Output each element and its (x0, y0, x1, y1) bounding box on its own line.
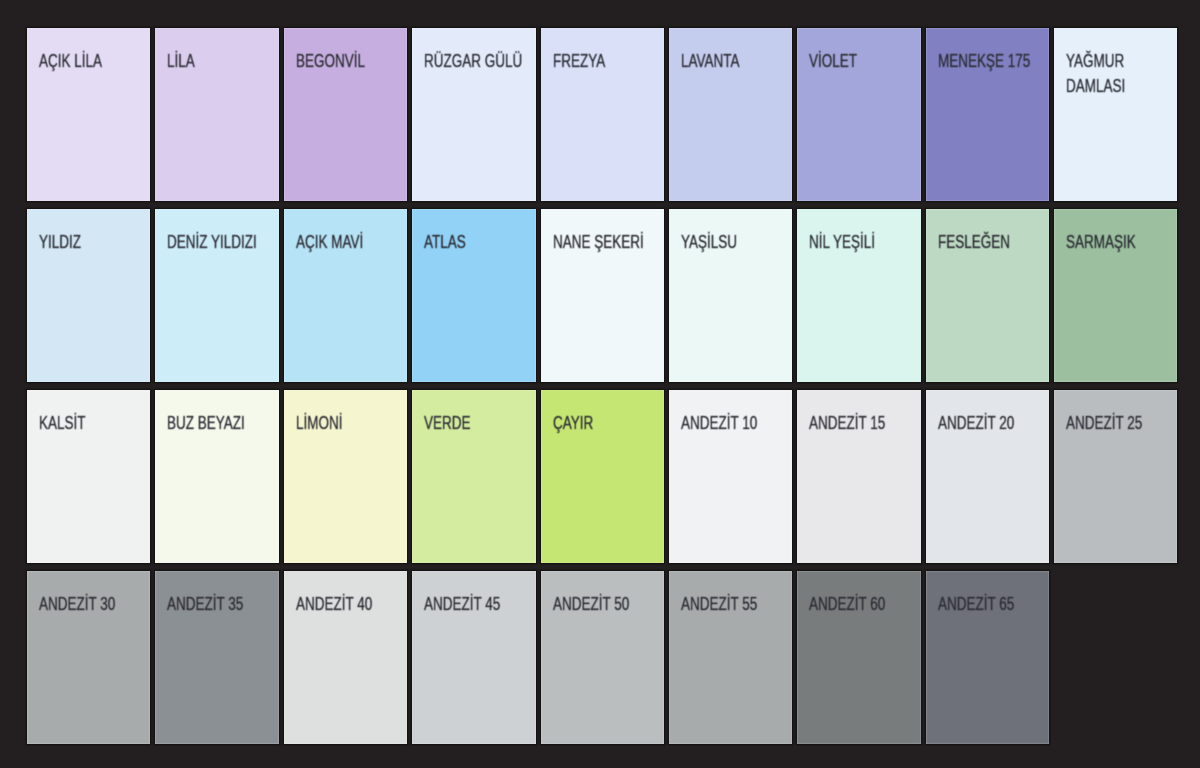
swatch: ANDEZİT 60: ANDEZİT 60 (809, 594, 885, 614)
swatch: LİMONİ (284, 390, 407, 563)
swatch: KALSİT (27, 390, 150, 563)
swatch: FREZYA (541, 28, 664, 201)
swatch: RÜZGAR GÜLÜ: RÜZGAR GÜLÜ (424, 51, 522, 71)
swatch: KALSİT: KALSİT (39, 413, 86, 433)
swatch: ANDEZİT 65 (926, 571, 1049, 744)
swatch: FESLEĞEN: FESLEĞEN (938, 232, 1010, 252)
swatch: ANDEZİT 30: ANDEZİT 30 (39, 594, 115, 614)
swatch: ANDEZİT 40: ANDEZİT 40 (296, 594, 372, 614)
swatch: VERDE: VERDE (424, 413, 471, 433)
swatch: ANDEZİT 60 (797, 571, 921, 744)
swatch: ANDEZİT 10 (669, 390, 792, 563)
swatch: MENEKŞE 175: MENEKŞE 175 (938, 51, 1030, 71)
swatch: ANDEZİT 35 (155, 571, 279, 744)
swatch: YAĞMUR DAMLASI: DAMLASI (1066, 76, 1125, 96)
swatch: YILDIZ (27, 209, 150, 382)
swatch: YAŞİLSU: YAŞİLSU (681, 232, 737, 252)
swatch: ANDEZİT 15 (797, 390, 921, 563)
swatch: ANDEZİT 25 (1054, 390, 1177, 563)
swatch: LAVANTA: LAVANTA (681, 51, 740, 71)
swatch: ANDEZİT 55 (669, 571, 792, 744)
swatch: ATLAS: ATLAS (424, 232, 466, 252)
swatch: ÇAYIR (541, 390, 664, 563)
swatch: DENİZ YILDIZI: DENİZ YILDIZI (167, 232, 257, 252)
swatch: ANDEZİT 50 (541, 571, 664, 744)
swatch: YAŞİLSU (669, 209, 792, 382)
swatch: YAĞMUR DAMLASI (1054, 28, 1177, 201)
swatch: NANE ŞEKERİ: NANE ŞEKERİ (553, 232, 644, 252)
swatch: ANDEZİT 50: ANDEZİT 50 (553, 594, 629, 614)
swatch: ANDEZİT 20 (926, 390, 1049, 563)
swatch: ANDEZİT 20: ANDEZİT 20 (938, 413, 1014, 433)
swatch: VİOLET (797, 28, 921, 201)
swatch: YAĞMUR DAMLASI: YAĞMUR (1066, 51, 1124, 71)
swatch: MENEKŞE 175 (926, 28, 1049, 201)
swatch: DENİZ YILDIZI (155, 209, 279, 382)
swatch: LAVANTA (669, 28, 792, 201)
swatch: RÜZGAR GÜLÜ (412, 28, 536, 201)
swatch: AÇIK MAVİ: AÇIK MAVİ (296, 232, 363, 252)
swatch: SARMAŞIK (1054, 209, 1177, 382)
swatch: YILDIZ: YILDIZ (39, 232, 81, 252)
swatch: LİMONİ: LİMONİ (296, 413, 343, 433)
swatch: NANE ŞEKERİ (541, 209, 664, 382)
swatch: ANDEZİT 45: ANDEZİT 45 (424, 594, 500, 614)
swatch: ANDEZİT 15: ANDEZİT 15 (809, 413, 885, 433)
swatch: ANDEZİT 40 (284, 571, 407, 744)
swatch: BEGONVİL: BEGONVİL (296, 51, 365, 71)
swatch: ÇAYIR: ÇAYIR (553, 413, 593, 433)
swatch: NİL YEŞİLİ (797, 209, 921, 382)
swatch: LİLA: LİLA (167, 51, 195, 71)
swatch: AÇIK LİLA (27, 28, 150, 201)
swatch: ANDEZİT 35: ANDEZİT 35 (167, 594, 243, 614)
swatch: FESLEĞEN (926, 209, 1049, 382)
swatch: AÇIK LİLA: AÇIK LİLA (39, 51, 102, 71)
swatch: ANDEZİT 10: ANDEZİT 10 (681, 413, 757, 433)
swatch: BUZ BEYAZI (155, 390, 279, 563)
swatch: NİL YEŞİLİ: NİL YEŞİLİ (809, 232, 875, 252)
swatch: FREZYA: FREZYA (553, 51, 605, 71)
swatch: LİLA (155, 28, 279, 201)
swatch: VERDE (412, 390, 536, 563)
swatch: AÇIK MAVİ (284, 209, 407, 382)
swatch: ATLAS (412, 209, 536, 382)
swatch: ANDEZİT 45 (412, 571, 536, 744)
swatch: ANDEZİT 65: ANDEZİT 65 (938, 594, 1014, 614)
swatch: VİOLET: VİOLET (809, 51, 857, 71)
swatch: BEGONVİL (284, 28, 407, 201)
swatch: SARMAŞIK: SARMAŞIK (1066, 232, 1136, 252)
swatch: ANDEZİT 55: ANDEZİT 55 (681, 594, 757, 614)
swatch: BUZ BEYAZI: BUZ BEYAZI (167, 413, 245, 433)
swatch: ANDEZİT 30 (27, 571, 150, 744)
swatch: ANDEZİT 25: ANDEZİT 25 (1066, 413, 1142, 433)
